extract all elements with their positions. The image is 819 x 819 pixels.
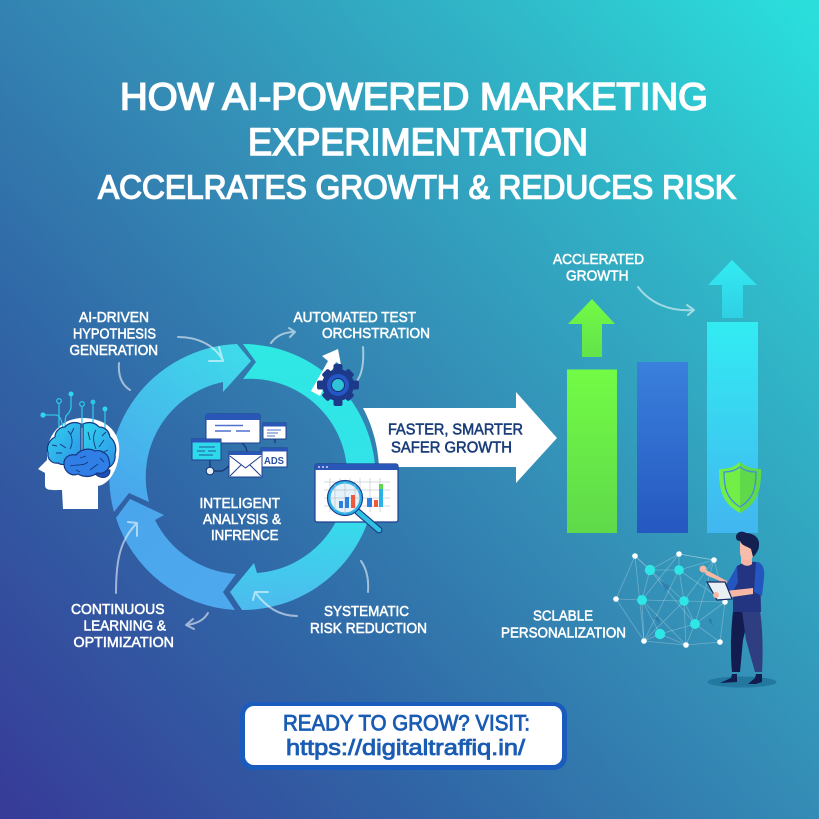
label: AI-driven hypothesis generation: GENERATION	[70, 343, 158, 359]
network graph	[613, 551, 728, 648]
person with tablet	[700, 532, 776, 688]
magnifier lens	[329, 482, 361, 514]
skin arms and neck	[703, 568, 753, 599]
title: EXPERIMENTATION	[248, 122, 588, 164]
bar: green	[567, 370, 617, 533]
arrow: arc 1	[109, 344, 251, 512]
icon: gear with rising arrow	[311, 349, 359, 406]
icon: analytics window with magnifier	[315, 464, 398, 530]
arrow: accelerated growth to bar	[638, 287, 694, 315]
blue arm	[725, 562, 764, 596]
label: intelligent analysis and inference	[200, 496, 281, 544]
connector: systematic	[361, 561, 368, 592]
magnifier handle	[358, 512, 379, 530]
label: systematic risk reduction	[310, 604, 427, 637]
white arrow	[311, 349, 341, 396]
label: automated test orchestration: ORCHSTRATION	[322, 326, 430, 342]
arrow: arc 2	[230, 344, 376, 610]
arrow: arc 3	[116, 499, 236, 610]
label: continuous learning and optimization	[71, 602, 174, 651]
label: automated test orchestration: AUTOMATED TEST	[294, 310, 416, 326]
bar: blue	[637, 362, 688, 533]
label: continuous learning and optimization: CONTINUOUS	[71, 602, 164, 618]
bar: cyan	[707, 322, 758, 533]
ads window: ADS	[264, 455, 284, 467]
envelope	[229, 452, 262, 477]
chart grid	[324, 478, 390, 512]
label: accelerated growth	[553, 252, 644, 284]
tablet	[707, 582, 732, 600]
white nodes	[613, 551, 728, 648]
torso	[733, 562, 761, 612]
label: accelerated growth: ACCLERATED	[553, 252, 644, 268]
label: AI-driven hypothesis generation	[70, 310, 158, 359]
label: continuous learning and optimization: LEARNING &	[84, 618, 166, 634]
title: ACCELRATES GROWTH & REDUCES RISK	[98, 168, 736, 206]
node	[206, 467, 214, 475]
icon: shield	[719, 462, 761, 513]
hair	[736, 532, 759, 557]
main browser window	[206, 414, 260, 443]
chart bars	[367, 498, 372, 507]
mesh facets	[654, 580, 713, 626]
label: systematic risk reduction: RISK REDUCTION	[310, 621, 427, 637]
arrow: continuous learning out	[186, 613, 208, 629]
brain lobes	[95, 468, 110, 477]
gear	[317, 364, 359, 406]
face	[740, 541, 754, 560]
arrow: continuous learning up	[116, 522, 137, 593]
connector lines	[210, 439, 275, 471]
cyan window	[192, 439, 221, 460]
connector: gear	[357, 347, 363, 381]
label: AI-driven hypothesis generation: AI-DRIVEN	[79, 310, 149, 326]
call to action button: READY TO GROW? VISIT:	[283, 710, 530, 736]
left leg	[731, 611, 750, 672]
icon: AI brain in head	[38, 392, 119, 509]
label: continuous learning and optimization: OPTIMIZATION	[74, 635, 174, 651]
label: automated test orchestration	[294, 310, 430, 342]
label: intelligent analysis and inference: ANALYSIS &	[203, 512, 281, 528]
arrow: to automated test	[271, 328, 295, 343]
call to action button	[240, 702, 567, 770]
head silhouette	[38, 418, 119, 509]
big arrow: faster smarter safer growth: SAFER GROWTH	[391, 440, 512, 456]
title: HOW AI-POWERED MARKETING	[120, 76, 708, 118]
ground shadow	[708, 676, 776, 688]
arrow: to hypothesis ring	[178, 337, 223, 361]
label: scalable personalization	[501, 608, 626, 642]
circular cycle of three arrows	[109, 344, 376, 610]
label: intelligent analysis and inference: INFRENCE	[211, 528, 279, 544]
cyan nodes	[637, 565, 700, 639]
arrow: risk reduction	[253, 592, 297, 616]
connector: hypothesis to brain	[119, 363, 130, 390]
small note window	[263, 423, 286, 439]
label: scalable personalization: SCLABLE	[533, 608, 593, 624]
arrow: cyan up	[708, 260, 757, 318]
label: systematic risk reduction: SYSTEMATIC	[324, 604, 409, 620]
big arrow: faster smarter safer growth	[363, 392, 557, 483]
label: accelerated growth: GROWTH	[566, 268, 628, 284]
label: AI-driven hypothesis generation: HYPOTHESIS	[73, 326, 156, 342]
title	[98, 76, 736, 206]
label: intelligent analysis and inference: INTELIGENT	[200, 496, 280, 512]
circuit lines	[40, 392, 108, 430]
label: scalable personalization: PERSONALIZATION	[501, 626, 626, 642]
arrow: green up	[568, 299, 615, 357]
shoes	[720, 674, 762, 684]
big arrow: faster smarter safer growth: FASTER, SMARTER	[388, 422, 523, 438]
call to action button: https://digitaltraffiq.in/	[286, 735, 526, 760]
icon group: marketing windows	[192, 414, 287, 477]
bar chart: growth	[567, 260, 758, 533]
right leg	[742, 611, 763, 672]
